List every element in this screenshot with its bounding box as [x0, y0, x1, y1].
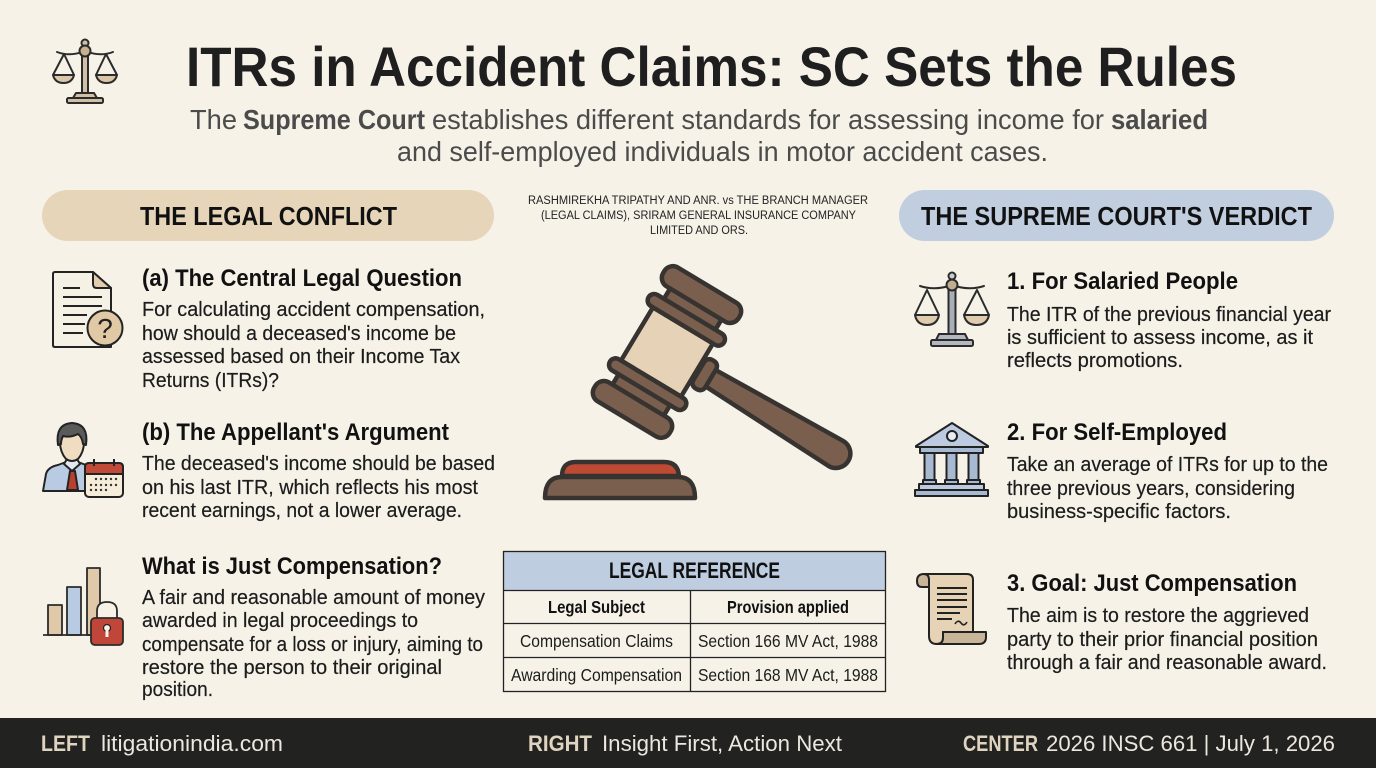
title: ITRs in Accident Claims: SC Sets the Rules: [186, 35, 1237, 98]
text block: goal just compensation: party to their prior financial position: [1007, 628, 1318, 651]
heading: the supreme court's verdict: THE SUPREME COURT'S VERDICT: [921, 201, 1312, 231]
table: legal reference: [504, 552, 886, 692]
text block: goal just compensation: through a fair and reasonable award.: [1007, 651, 1327, 674]
subtitle: establishes different standards for assessing income for: [432, 104, 1104, 135]
table: legal reference: Section 168 MV Act, 1988: [698, 665, 878, 685]
text block: central legal question: how should a deceased's income be: [142, 322, 456, 345]
text block: for salaried people: [1007, 268, 1331, 372]
table: legal reference: Section 166 MV Act, 1988: [698, 631, 878, 651]
icon: scales of justice (header): [53, 40, 117, 103]
table: legal reference: Provision applied: [727, 597, 849, 617]
icon: document with question mark: [53, 272, 122, 347]
text block: appellant's argument: (b) The Appellant's Argument: [142, 419, 449, 446]
table: legal reference: Awarding Compensation: [511, 665, 682, 685]
heading: the legal conflict: THE LEGAL CONFLICT: [140, 201, 397, 231]
footer bar: litigationindia.com: [101, 731, 283, 756]
icon: bar chart with padlock: [43, 568, 123, 645]
text block: for salaried people: The ITR of the previous financial year: [1007, 303, 1331, 326]
subtitle: salaried: [1111, 104, 1208, 135]
text block: appellant's argument: [142, 419, 495, 522]
table: legal reference: Legal Subject: [548, 597, 645, 617]
footer bar: CENTER: [963, 731, 1038, 756]
text block: just compensation definition: position.: [142, 678, 213, 701]
text block: just compensation definition: What is Just Compensation?: [142, 553, 442, 580]
icon: scroll: [917, 574, 986, 644]
footer bar: LEFT: [41, 731, 90, 756]
subtitle: Supreme Court: [243, 104, 425, 135]
text block: just compensation definition: [142, 553, 486, 701]
text block: for self-employed: three previous years, considering: [1007, 477, 1295, 500]
text block: for self-employed: business-specific factors.: [1007, 500, 1231, 523]
text block: goal just compensation: The aim is to restore the aggrieved: [1007, 604, 1309, 627]
text block: for self-employed: [1007, 419, 1328, 523]
icon: document with question mark: ?: [97, 313, 113, 344]
text block: for salaried people: reflects promotions.: [1007, 349, 1183, 372]
heading: the supreme court's verdict: [899, 190, 1334, 241]
case title: [528, 195, 868, 237]
text block: for salaried people: is sufficient to assess income, as it: [1007, 326, 1313, 349]
subtitle: [190, 104, 1208, 167]
subtitle: and self-employed individuals in motor accident cases.: [397, 136, 1048, 167]
text block: for self-employed: Take an average of ITRs for up to the: [1007, 453, 1328, 476]
footer bar: RIGHT: [528, 731, 593, 756]
text block: just compensation definition: restore the person to their original: [142, 656, 442, 679]
footer bar: 2026 INSC 661 | July 1, 2026: [1046, 731, 1335, 756]
text block: central legal question: Returns (ITRs)?: [142, 369, 279, 392]
text block: appellant's argument: on his last ITR, which reflects his most: [142, 476, 478, 499]
text block: goal just compensation: 3. Goal: Just Compensation: [1007, 570, 1297, 597]
text block: central legal question: (a) The Central Legal Question: [142, 265, 462, 292]
case title: (LEGAL CLAIMS), SRIRAM GENERAL INSURANCE COMPANY: [541, 210, 856, 222]
text block: just compensation definition: compensate for a loss or injury, aiming to: [142, 633, 483, 656]
case title: LIMITED AND ORS.: [650, 225, 748, 237]
text block: central legal question: assessed based on their Income Tax: [142, 345, 461, 368]
icon: courthouse: [915, 423, 988, 496]
icon: person with calendar: [43, 423, 123, 497]
footer bar: Insight First, Action Next: [602, 731, 842, 756]
text block: for salaried people: 1. For Salaried People: [1007, 268, 1238, 295]
text block: appellant's argument: recent earnings, not a lower average.: [142, 499, 462, 522]
case title: RASHMIREKHA TRIPATHY AND ANR. vs THE BRANCH MANAGER: [528, 195, 868, 207]
text block: for self-employed: 2. For Self-Employed: [1007, 419, 1227, 446]
text block: just compensation definition: awarded in legal proceedings to: [142, 609, 418, 632]
table: legal reference: Compensation Claims: [520, 631, 673, 651]
heading: the legal conflict: [42, 190, 494, 241]
panel: the legal conflict: [42, 190, 495, 701]
footer bar: [0, 718, 1376, 768]
text block: central legal question: For calculating accident compensation,: [142, 298, 485, 321]
text block: just compensation definition: A fair and reasonable amount of money: [142, 586, 486, 609]
icon: scales of justice: [915, 272, 989, 346]
text block: appellant's argument: The deceased's income should be based: [142, 452, 495, 475]
text block: goal just compensation: [1007, 570, 1327, 674]
icon: gavel: [545, 262, 888, 528]
subtitle: The: [190, 104, 237, 135]
text block: central legal question: [142, 265, 485, 392]
table: legal reference: LEGAL REFERENCE: [609, 558, 780, 583]
panel: the supreme court's verdict: [899, 190, 1334, 674]
